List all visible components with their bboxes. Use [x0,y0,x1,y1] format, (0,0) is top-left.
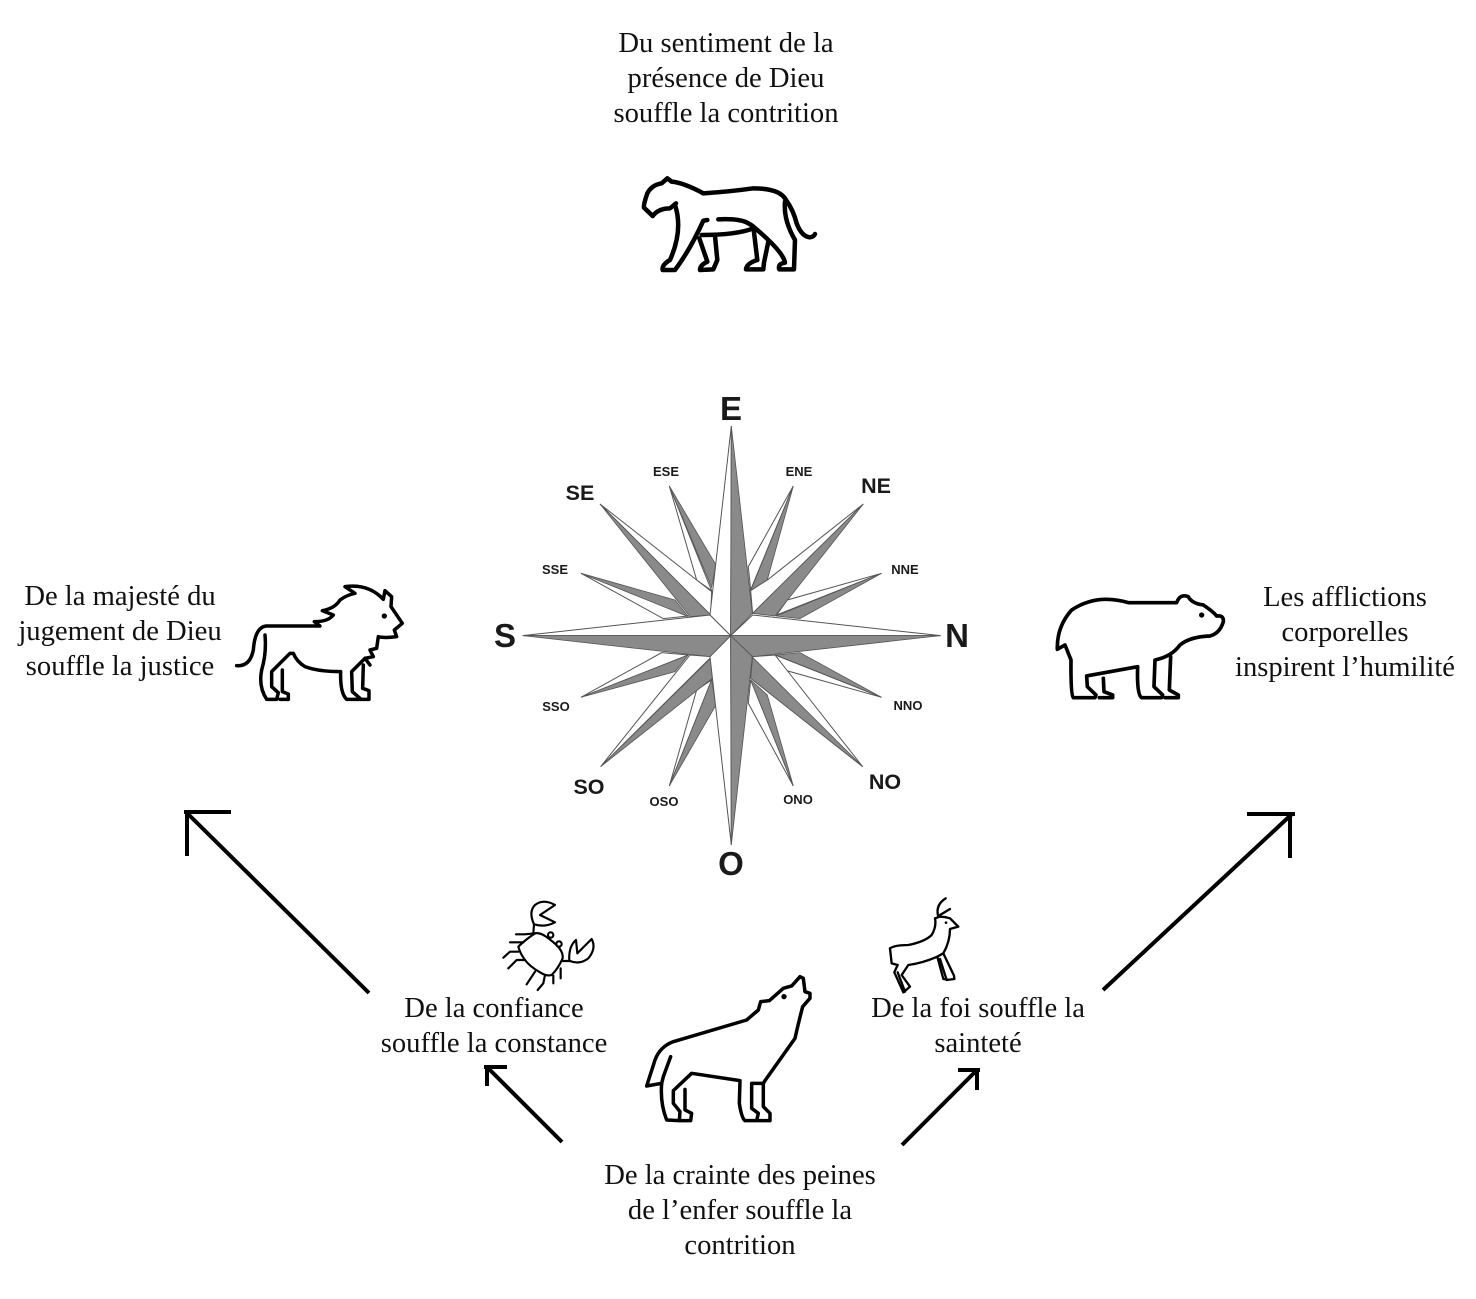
icon: crab [503,902,594,990]
compass labels: NNO [894,698,922,713]
compass labels [494,390,969,882]
compass labels: SE [566,481,594,505]
icon: bear [1057,596,1223,698]
text: constancy [381,993,607,1059]
compass labels: SO [573,775,605,799]
compass labels: E [720,390,742,427]
secondary points [581,486,882,786]
arrow: to justice [184,812,369,993]
text: top contrition [614,28,838,129]
text: top contrition: souffle la contrition [614,98,838,129]
text: justice: De la majesté du [24,581,216,612]
text: justice: jugement de Dieu [18,616,222,647]
compass labels: SSE [542,562,568,577]
icon: wolf [647,977,810,1121]
text: justice [18,581,222,682]
text: constancy: De la confiance [404,993,584,1024]
arrow: to holiness [902,1068,980,1145]
compass labels: S [494,617,516,654]
text: holiness: sainteté [934,1028,1022,1059]
text: holiness [871,993,1085,1059]
arrow: to humility [1103,814,1295,990]
compass labels: OSO [650,794,678,809]
compass labels: O [718,845,744,882]
text: fear of hell [604,1160,876,1261]
text: fear of hell: De la crainte des peines [604,1160,876,1191]
text: humility: corporelles [1281,617,1409,648]
text: top contrition: présence de Dieu [628,63,824,94]
compass labels: SSO [542,699,570,714]
compass rose [494,390,969,882]
text: constancy: souffle la constance [381,1028,607,1059]
intercardinal points [600,504,863,767]
compass labels: N [945,617,969,654]
icon: deer [890,898,958,992]
compass labels: ENE [786,464,813,479]
icon: tiger [644,178,815,270]
text: justice: souffle la justice [26,651,214,682]
text: top contrition: Du sentiment de la [618,28,834,59]
cardinal points [523,426,941,845]
compass labels: ESE [653,464,679,479]
icon: lion [237,586,402,699]
text: fear of hell: contrition [684,1230,796,1261]
compass labels: ONO [783,792,813,807]
compass labels: NE [861,474,891,498]
text: humility: inspirent l’humilité [1235,652,1455,683]
text: holiness: De la foi souffle la [871,993,1085,1024]
compass labels: NNE [891,562,919,577]
text: humility: Les afflictions [1263,582,1427,613]
compass labels: NO [869,770,901,794]
text: humility [1235,582,1455,683]
arrow: to constancy [484,1066,562,1142]
text: fear of hell: de l’enfer souffle la [628,1195,852,1226]
